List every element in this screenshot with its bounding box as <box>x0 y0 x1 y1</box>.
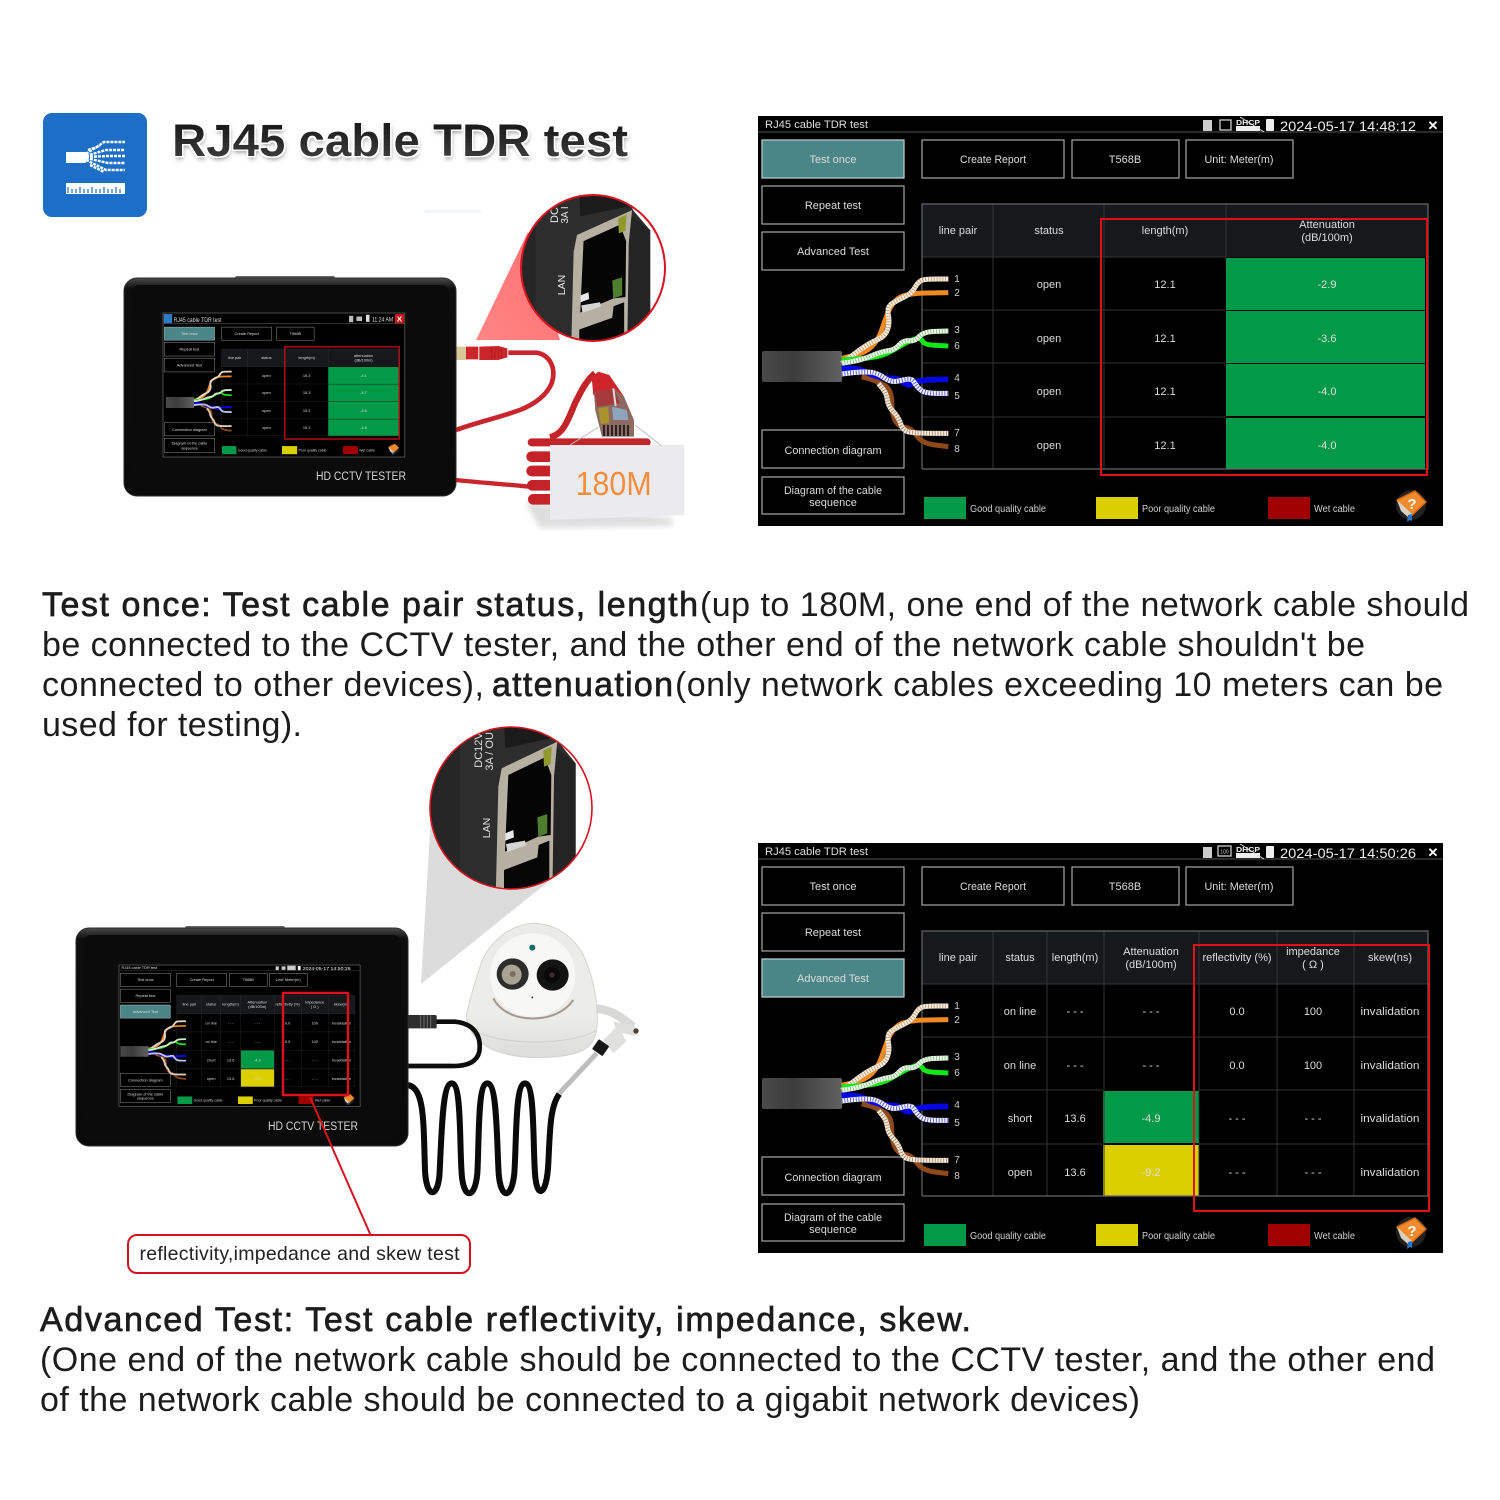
results table: 100 <box>1304 1060 1322 1072</box>
mini screen 2: 2024-05-17 14:50:26 <box>303 966 351 972</box>
results table: status <box>1005 952 1035 964</box>
status bar: 2024-05-17 14:48:12 <box>1280 118 1416 134</box>
network plug on pigtail <box>559 1025 626 1093</box>
mini screen 1: -4.6 <box>360 408 367 413</box>
status bar: ✕ <box>1428 118 1438 133</box>
camera pigtail collar <box>595 1008 633 1027</box>
mini screen 2: - - - <box>228 1021 234 1025</box>
mini screen 2: 0.0 <box>285 1021 290 1025</box>
red highlight on mini screen <box>283 993 348 1095</box>
mini screen 2: - - - <box>312 1077 318 1081</box>
results table: invalidation <box>1360 1113 1420 1125</box>
mini screen 2: status <box>206 1003 216 1007</box>
device body 1: HD CCTV TESTER <box>316 471 406 483</box>
wire pair diagram: 2 <box>954 288 960 299</box>
mini screen 1: T568B <box>290 331 301 336</box>
cable coil <box>532 442 647 499</box>
mini screen 2: line pair <box>183 1003 197 1007</box>
left buttons: Connection diagram <box>784 1172 882 1184</box>
black cable loop <box>407 1022 480 1066</box>
highlight box <box>1194 945 1429 1211</box>
left buttons: Advanced Test <box>797 973 869 985</box>
text block: test once description: used for testing). <box>42 706 302 744</box>
results table: 100 <box>1304 1006 1322 1018</box>
highlight box <box>1101 219 1427 475</box>
results table: 12.1 <box>1154 333 1176 345</box>
mini screen 2: Create Report <box>190 978 215 982</box>
text block: advanced test description: (One end of the network cable should be connected to the CCTV tester, and the other end <box>40 1341 1435 1379</box>
mini screen 2: Connection diagram <box>128 1079 163 1083</box>
left buttons: Diagram of the cable <box>784 1212 882 1224</box>
legend <box>924 1224 1355 1246</box>
callout: reflectivity, impedance and skew test <box>128 1235 470 1273</box>
mini screen 2: on line <box>206 1040 217 1044</box>
mini screen 1: Poor quality cable <box>299 448 327 452</box>
mini screen 2: Wet cable <box>315 1099 330 1103</box>
results table: Attenuation <box>1299 219 1355 231</box>
status bar: 2024-05-17 14:50:26 <box>1280 845 1416 861</box>
wire pair diagram: 8 <box>954 444 960 455</box>
mini screen 2: Advanced Test <box>133 1010 159 1014</box>
mini screen 1: 15.3 <box>303 390 310 395</box>
results table: on line <box>1004 1006 1036 1018</box>
status bar: DHCP <box>1236 118 1260 127</box>
text block: test once description: attenuation <box>492 666 673 704</box>
mini screen 1: sequence <box>181 445 198 450</box>
results table: status <box>1034 225 1064 237</box>
wire pair diagram: 3 <box>954 1052 960 1063</box>
wire pair diagram: 2 <box>954 1015 960 1026</box>
mini screen 2: length(m) <box>222 1003 239 1007</box>
mini screen 2: on line <box>206 1021 217 1025</box>
status bar <box>758 844 1443 861</box>
top buttons: T568B <box>1109 154 1141 166</box>
sign shadow <box>525 502 672 528</box>
dome camera <box>467 923 597 1058</box>
results table: - - - <box>1304 1113 1322 1125</box>
icon: help book <box>1396 490 1426 522</box>
mini screen 1: 15.2 <box>303 408 310 413</box>
magnified LAN port 2: DC12V <box>473 732 485 768</box>
results table: (dB/100m) <box>1301 232 1353 244</box>
mini screen 1: RJ45 cable TDR test <box>174 317 222 324</box>
wire pair diagram <box>762 1001 960 1182</box>
magnifier wedge: pink <box>476 232 560 340</box>
left buttons: Diagram of the cable <box>784 485 882 497</box>
results table: 0.0 <box>1229 1060 1245 1072</box>
text block: test once description: (only network cables exceeding 10 meters can be <box>675 666 1443 704</box>
mini screen 2: invalidation <box>332 1040 351 1044</box>
icon: help book: ? <box>1407 496 1417 513</box>
status bar: ✕ <box>1428 845 1438 860</box>
results table: open <box>1008 1167 1032 1179</box>
results table: length(m) <box>1052 952 1098 964</box>
illustration: tester with dome camera <box>76 687 639 1193</box>
mini screen 2: skew(ns) <box>334 1003 350 1007</box>
mini screen 1: -4.1 <box>360 373 367 378</box>
results table: 12.1 <box>1154 279 1176 291</box>
left buttons: Repeat test <box>805 927 861 939</box>
mini screen 2: - - - <box>254 1021 261 1025</box>
mini screen 1: 15.3 <box>303 425 310 430</box>
mini screen 2 <box>119 965 360 1106</box>
status bar: 100 <box>1220 850 1229 856</box>
results table: skew(ns) <box>1368 952 1412 964</box>
device body 1 <box>124 276 456 496</box>
results table: length(m) <box>1142 225 1188 237</box>
left buttons: sequence <box>809 1224 857 1236</box>
icon: help book: ? <box>1407 1223 1417 1240</box>
callout: reflectivity, impedance and skew test: reflectivity,impedance and skew test <box>140 1243 460 1265</box>
wire pair diagram: 5 <box>954 1118 960 1129</box>
wire pair diagram: 7 <box>954 428 960 439</box>
wire pair diagram: 7 <box>954 1155 960 1166</box>
results table <box>922 931 1428 1196</box>
icon: RJ45 cable and ruler on blue tile <box>43 113 147 217</box>
legend: Good quality cable <box>970 504 1046 515</box>
mini screen 1: open <box>262 425 271 430</box>
mini screen 2: invalidation <box>332 1021 351 1025</box>
top buttons: Create Report <box>960 881 1026 893</box>
illustration: tester with red cable <box>124 159 684 528</box>
wire pair diagram: 4 <box>954 373 960 384</box>
mini screen 2: invalidation <box>332 1058 351 1062</box>
mini screen 1: Test once <box>181 331 198 336</box>
mini screen 1: 15.2 <box>303 373 310 378</box>
mini screen 2: T568B <box>242 978 254 982</box>
red cable lower <box>456 480 528 487</box>
heading: RJ45 cable TDR test: RJ45 cable TDR test <box>172 115 628 166</box>
wire pair diagram: 6 <box>954 341 960 352</box>
mini screen 2: Attenuation <box>248 1001 267 1005</box>
wire pair diagram <box>762 274 960 455</box>
panel: TDR test screen, advanced test <box>758 843 1443 1253</box>
magnified LAN port 1 <box>520 194 666 342</box>
legend: Wet cable <box>1314 504 1355 515</box>
mini screen 1: Create Report <box>234 331 260 336</box>
results table: line pair <box>939 225 978 237</box>
magnified LAN port 2 <box>429 726 593 890</box>
results table: - - - <box>1066 1060 1084 1072</box>
text block: test once description: connected to other devices), <box>42 666 484 704</box>
results table: on line <box>1004 1060 1036 1072</box>
icon: help book <box>1396 1217 1426 1249</box>
status bar <box>758 117 1443 134</box>
wire pair diagram: 1 <box>954 1001 960 1012</box>
mini screen 2: - - - <box>312 1058 318 1062</box>
mini screen 1: (dB/100m) <box>354 357 373 362</box>
mini screen 1: open <box>262 373 271 378</box>
mini screen 2: open <box>207 1077 216 1081</box>
results table: ( Ω ) <box>1302 959 1324 971</box>
text block: advanced test description <box>40 1301 1435 1419</box>
text block: test once description <box>42 586 1469 744</box>
mini screen 2: Diagram of the cable <box>128 1092 163 1096</box>
text block: advanced test description: of the network cable should be connected to a gigabit network devices) <box>40 1381 1140 1419</box>
mini screen 2: RJ45 cable TDR test <box>121 966 158 970</box>
wire pair diagram: 3 <box>954 325 960 336</box>
magnified LAN port 2: 3A / OUT <box>484 725 496 771</box>
mini screen 2: invalidation <box>332 1077 351 1081</box>
results table: - - - <box>1142 1006 1160 1018</box>
mini screen 2: -4.9 <box>254 1058 261 1062</box>
wire pair diagram: 6 <box>954 1068 960 1079</box>
status bar: RJ45 cable TDR test <box>765 846 868 858</box>
results table: reflectivity (%) <box>1202 952 1272 964</box>
mini screen 2: Unit: Meter(m) <box>276 978 301 982</box>
top buttons <box>922 867 1293 905</box>
red cable upper loop <box>456 353 553 430</box>
top buttons: Unit: Meter(m) <box>1204 881 1274 893</box>
mini screen 2: Repeat test <box>136 994 156 998</box>
left buttons: Test once <box>809 154 857 166</box>
wire pair diagram: 4 <box>954 1100 960 1111</box>
results table: -3.6 <box>1318 333 1336 345</box>
results table: 0.0 <box>1229 1006 1245 1018</box>
wire pair diagram: 1 <box>954 274 960 285</box>
results table: open <box>1037 386 1061 398</box>
mini screen 1: length(m) <box>298 355 316 360</box>
results table: -9.2 <box>1142 1167 1160 1179</box>
results table: -4.0 <box>1318 386 1336 398</box>
wire pair diagram: 5 <box>954 391 960 402</box>
mini screen 1: Advanced Test <box>177 362 203 367</box>
results table <box>922 204 1428 469</box>
upright RJ45 plug <box>592 372 634 437</box>
results table: impedance <box>1286 946 1340 958</box>
mini screen 2: sequence <box>137 1097 154 1101</box>
mini screen 2: -9.2 <box>254 1077 261 1081</box>
results table: 12.1 <box>1154 440 1176 452</box>
panel: TDR test screen, test once <box>758 116 1443 526</box>
top buttons: T568B <box>1109 881 1141 893</box>
results table: invalidation <box>1360 1167 1420 1179</box>
mini screen 2: - - - <box>228 1040 234 1044</box>
mini screen 2: 100 <box>311 1021 318 1025</box>
coiled black cable <box>407 1083 559 1193</box>
mini screen 2: - - - <box>285 1077 291 1081</box>
results table: open <box>1037 279 1061 291</box>
mini screen 2: Poor quality cable <box>254 1099 282 1103</box>
mini screen 1: Wet cable <box>359 448 375 452</box>
legend: Wet cable <box>1314 1231 1355 1242</box>
left buttons <box>762 140 904 514</box>
upright cable <box>550 373 595 437</box>
mini screen 2: short <box>207 1058 216 1062</box>
arrow: leader line to callout <box>310 1097 371 1236</box>
results table: - - - <box>1066 1006 1084 1018</box>
results table: invalidation <box>1360 1006 1420 1018</box>
results table: -2.9 <box>1318 279 1336 291</box>
results table: -4.9 <box>1142 1113 1160 1125</box>
mini screen 1: Good quality cable <box>238 448 267 452</box>
magnified LAN port 2: LAN <box>481 818 493 838</box>
mini screen 1: Repeat test <box>180 346 200 351</box>
mini screen 1: Connection diagram <box>172 427 207 432</box>
mini screen 1: line pair <box>228 355 242 360</box>
mini screen 1: -4.8 <box>360 425 367 430</box>
legend: Poor quality cable <box>1142 1231 1215 1242</box>
device body 2: HD CCTV TESTER <box>268 1121 358 1133</box>
mini screen 2: - - - <box>254 1040 261 1044</box>
top buttons: Unit: Meter(m) <box>1204 154 1274 166</box>
results table: - - - <box>1304 1167 1322 1179</box>
legend: Poor quality cable <box>1142 504 1215 515</box>
left buttons: Repeat test <box>805 200 861 212</box>
left buttons: Connection diagram <box>784 445 882 457</box>
top buttons <box>922 140 1293 178</box>
mini screen 1: -4.7 <box>360 390 367 395</box>
results table: - - - <box>1142 1060 1160 1072</box>
status bar: RJ45 cable TDR test <box>765 119 868 131</box>
results table: 12.1 <box>1154 386 1176 398</box>
mini screen 1: attenuation <box>354 353 373 358</box>
left buttons: Test once <box>809 881 857 893</box>
mini screen 2: reflectivity (%) <box>275 1003 300 1007</box>
results table: - - - <box>1228 1113 1246 1125</box>
mini screen 2: 0.0 <box>285 1040 290 1044</box>
mini screen 1: Diagram of the cable <box>172 441 207 446</box>
mini screen 1: 11:24 AM <box>372 317 393 323</box>
mini screen 2: - - - <box>285 1058 291 1062</box>
hanging strings <box>570 425 662 446</box>
magnified LAN port 1: 3A I <box>560 206 571 224</box>
barrel connector <box>613 1022 639 1036</box>
legend: Good quality cable <box>970 1231 1046 1242</box>
results table: open <box>1037 440 1061 452</box>
left buttons: Advanced Test <box>797 246 869 258</box>
magnified LAN port 1: LAN <box>556 275 568 295</box>
mini screen 2: 13.6 <box>227 1077 234 1081</box>
results table: Attenuation <box>1123 946 1179 958</box>
mini screen 2: ( Ω ) <box>311 1005 319 1009</box>
top buttons: Create Report <box>960 154 1026 166</box>
text block: test once description: Test once: Test cable pair status, length <box>42 586 698 624</box>
mini screen 1: X <box>397 314 403 323</box>
magnifier wedge: grey <box>421 815 548 984</box>
device body 2 <box>76 926 408 1146</box>
results table: open <box>1037 333 1061 345</box>
mini screen 2: (dB/100m) <box>248 1005 267 1009</box>
results table: 13.6 <box>1064 1113 1086 1125</box>
mini screen 2: Test once <box>137 978 154 982</box>
sign: 180M <box>550 445 684 520</box>
results table: -4.0 <box>1318 440 1336 452</box>
left buttons: sequence <box>809 497 857 509</box>
mini screen 1: open <box>262 408 271 413</box>
results table: invalidation <box>1360 1060 1420 1072</box>
black plug <box>407 1015 437 1028</box>
wire pair diagram: 8 <box>954 1171 960 1182</box>
sign: 180M: 180M <box>576 466 652 503</box>
results table: line pair <box>939 952 978 964</box>
mini screen 1: open <box>262 390 271 395</box>
legend <box>924 497 1355 519</box>
mini screen 2: 13.6 <box>227 1058 234 1062</box>
mini screen 1: status <box>261 355 272 360</box>
results table: 13.6 <box>1064 1167 1086 1179</box>
mini screen 1 <box>163 313 405 457</box>
results table: short <box>1008 1113 1032 1125</box>
text block: test once description: be connected to the CCTV tester, and the other end of the network cable shouldn't be <box>42 626 1365 664</box>
mini screen 2: impedance <box>305 1001 324 1005</box>
results table: (dB/100m) <box>1125 959 1177 971</box>
status bar: DHCP <box>1236 845 1260 854</box>
left buttons <box>762 867 904 1241</box>
results table: - - - <box>1228 1167 1246 1179</box>
plug on tester <box>456 346 507 360</box>
mini screen 2: Good quality cable <box>194 1099 223 1103</box>
text block: test once description: (up to 180M, one end of the network cable should <box>700 586 1469 624</box>
mini screen 2: 100 <box>311 1040 318 1044</box>
text block: advanced test description: Advanced Test: Test cable reflectivity, impedance, skew. <box>40 1301 971 1339</box>
magnified LAN port 1: DC <box>549 207 561 223</box>
